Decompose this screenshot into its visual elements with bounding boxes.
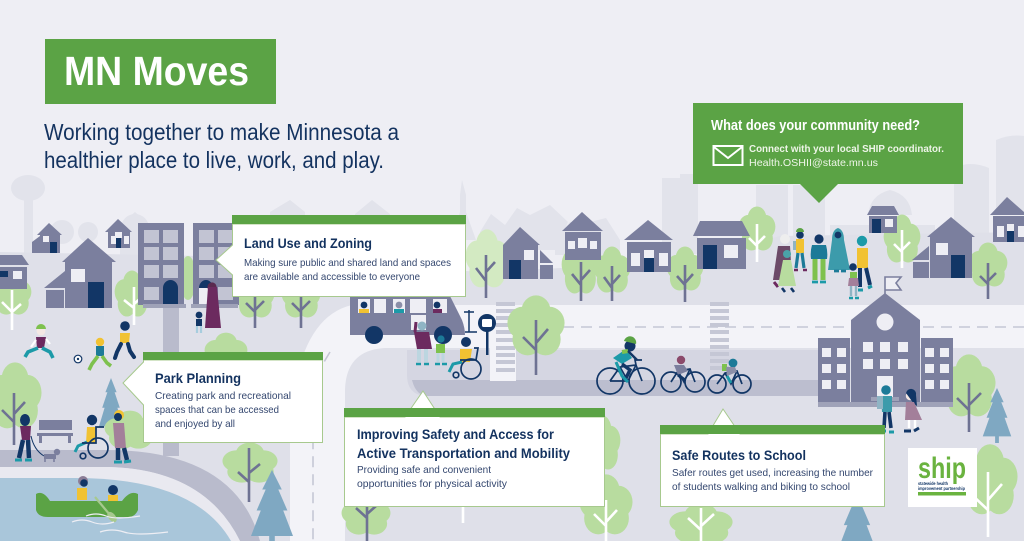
panel: park planning: Creating park and recreational (155, 390, 291, 402)
crosswalk school stripes (710, 302, 729, 370)
tree: pale behind building (180, 256, 196, 300)
house: far right (990, 197, 1024, 242)
community group (773, 228, 872, 298)
soccer ball (74, 355, 82, 363)
tree: north left (0, 273, 31, 330)
tree: pair left (562, 239, 598, 301)
apartment building right (191, 223, 239, 308)
distant skyline (11, 136, 1024, 260)
tree: right of community (884, 215, 920, 268)
kid: yellow top (793, 228, 807, 270)
panel: safe routes to school: Safe Routes to School (672, 447, 806, 463)
house: far left (0, 255, 29, 289)
child: light green dress (778, 250, 796, 292)
title banner: MN Moves (64, 48, 249, 94)
park path curve (0, 450, 260, 541)
tree: crossing (507, 295, 565, 375)
tree: above park box (205, 333, 247, 371)
panel: park planning: and enjoyed by all (155, 418, 235, 430)
child: student in mauve dress (904, 389, 922, 431)
house: center right (624, 220, 673, 272)
school (818, 277, 953, 407)
logo: SHIP: ship (918, 452, 966, 485)
tree: below safe routes (669, 504, 733, 541)
spruce: below safe routes (839, 490, 875, 541)
north-south park path (163, 306, 179, 456)
person: woman in yellow hat (113, 410, 131, 462)
tree trunk: below improving middle (462, 506, 464, 523)
bike path (412, 380, 830, 396)
panel: improving safety and access: Active Transportation and Mobility (357, 445, 570, 461)
panel: land use and zoning (216, 215, 466, 296)
spruce: park (99, 378, 123, 433)
panel: park planning: Park Planning (155, 370, 241, 386)
logo: SHIP (908, 448, 977, 507)
runner: woman in yellow (115, 321, 134, 358)
house: center small behind trees (562, 212, 603, 260)
title banner (45, 39, 276, 104)
dog (44, 449, 60, 462)
spruce: by school (983, 388, 1011, 443)
tree: far right (969, 243, 1007, 299)
person: boarding bus (414, 322, 432, 364)
tree: north center pale (466, 229, 508, 298)
person: yellow shirt (857, 236, 872, 290)
panel: land use and zoning: Making sure public and shared land and spaces (244, 257, 451, 269)
panel: improving safety and access: Improving Safety and Access for (357, 426, 554, 442)
sidewalk along road (407, 350, 850, 396)
shrub: park (104, 411, 156, 449)
panel: what does your community need: Connect with your local SHIP coordinator. (749, 143, 944, 155)
panel: safe routes to school: Safer routes get used, increasing the number (672, 467, 873, 479)
spruce: lake shore (251, 470, 293, 541)
park bench (37, 420, 73, 443)
subtitle: healthier place to live, work, and play. (44, 147, 384, 173)
subtitle (44, 119, 399, 173)
runner: child in yellow hat (89, 338, 111, 370)
tree: park left (0, 362, 42, 445)
panel: park planning (123, 352, 323, 442)
tree: by school (942, 354, 996, 432)
tree: under land use right (282, 274, 320, 328)
person: woman walking dog (15, 414, 44, 460)
bus (350, 296, 465, 344)
bike rack (464, 310, 477, 332)
logo: SHIP: statewide health (918, 481, 948, 486)
east-west road with curve to south (290, 305, 1024, 541)
panel: safe routes to school (660, 409, 885, 506)
panel: improving safety and access (344, 391, 605, 506)
house: large left (44, 238, 116, 308)
panel: land use and zoning: are available and accessible to everyone (244, 271, 420, 283)
house: small with door (105, 219, 132, 248)
house: center with wing (503, 227, 553, 279)
person: navy sweater (811, 234, 827, 282)
tree: by large house (115, 271, 149, 325)
lake shore (0, 467, 240, 541)
ground (0, 232, 1024, 541)
panel: improving safety and access: Providing safe and convenient (357, 464, 491, 476)
person: woman in maroon dress (205, 282, 221, 328)
tree: behind logo (962, 444, 1018, 537)
tree: under land use left (236, 274, 274, 328)
runner: green cap (25, 324, 53, 358)
panel: what does your community need (693, 103, 963, 203)
apartment building left (138, 223, 186, 308)
person: wheelchair at bus stop (449, 337, 481, 379)
tree: left of community (667, 247, 703, 302)
panel: improving safety and access: opportunities for physical activity (357, 478, 508, 490)
house: large right (912, 217, 975, 278)
crosswalk east stripes (496, 302, 515, 372)
house: behind right of community (867, 206, 899, 233)
child: with woman (196, 312, 202, 333)
cyclist: child two (708, 359, 751, 393)
person: teal robe (828, 228, 850, 271)
panel: what does your community need: Health.OSHII@state.mn.us (749, 157, 878, 169)
icon: envelope (714, 146, 742, 165)
tree: pair right (594, 247, 630, 301)
panel: park planning: spaces that can be accessed (155, 404, 279, 416)
tree: behind improving box upper (584, 415, 620, 469)
road center dashes (313, 327, 1024, 541)
panel: what does your community need: What does your community need? (711, 118, 920, 134)
person: wheelchair in park (75, 415, 108, 459)
house: left of community (693, 221, 750, 269)
child: boarding bus (435, 335, 447, 364)
subtitle: Working together to make Minnesota a (44, 119, 399, 145)
bus stop sign (478, 314, 496, 355)
cyclist: child one (661, 356, 705, 392)
panel: safe routes to school: of students walking and biking to school (672, 481, 850, 493)
logo: SHIP: improvement partnership (918, 486, 965, 491)
crosswalk strip backgrounds (490, 305, 516, 381)
child: mauve skirt (848, 263, 859, 298)
tree: below improving left (342, 495, 390, 541)
tree: behind improving box lower (579, 474, 633, 541)
house: small left (32, 223, 62, 253)
child: student with backpack (877, 385, 894, 432)
person: elder (773, 234, 792, 287)
tree: behind community (739, 207, 775, 262)
canoe with paddlers (36, 476, 168, 534)
tree: south of park box (222, 443, 278, 502)
lake (0, 478, 231, 541)
cyclist: adult (597, 336, 655, 394)
panel: land use and zoning: Land Use and Zoning (244, 235, 372, 251)
